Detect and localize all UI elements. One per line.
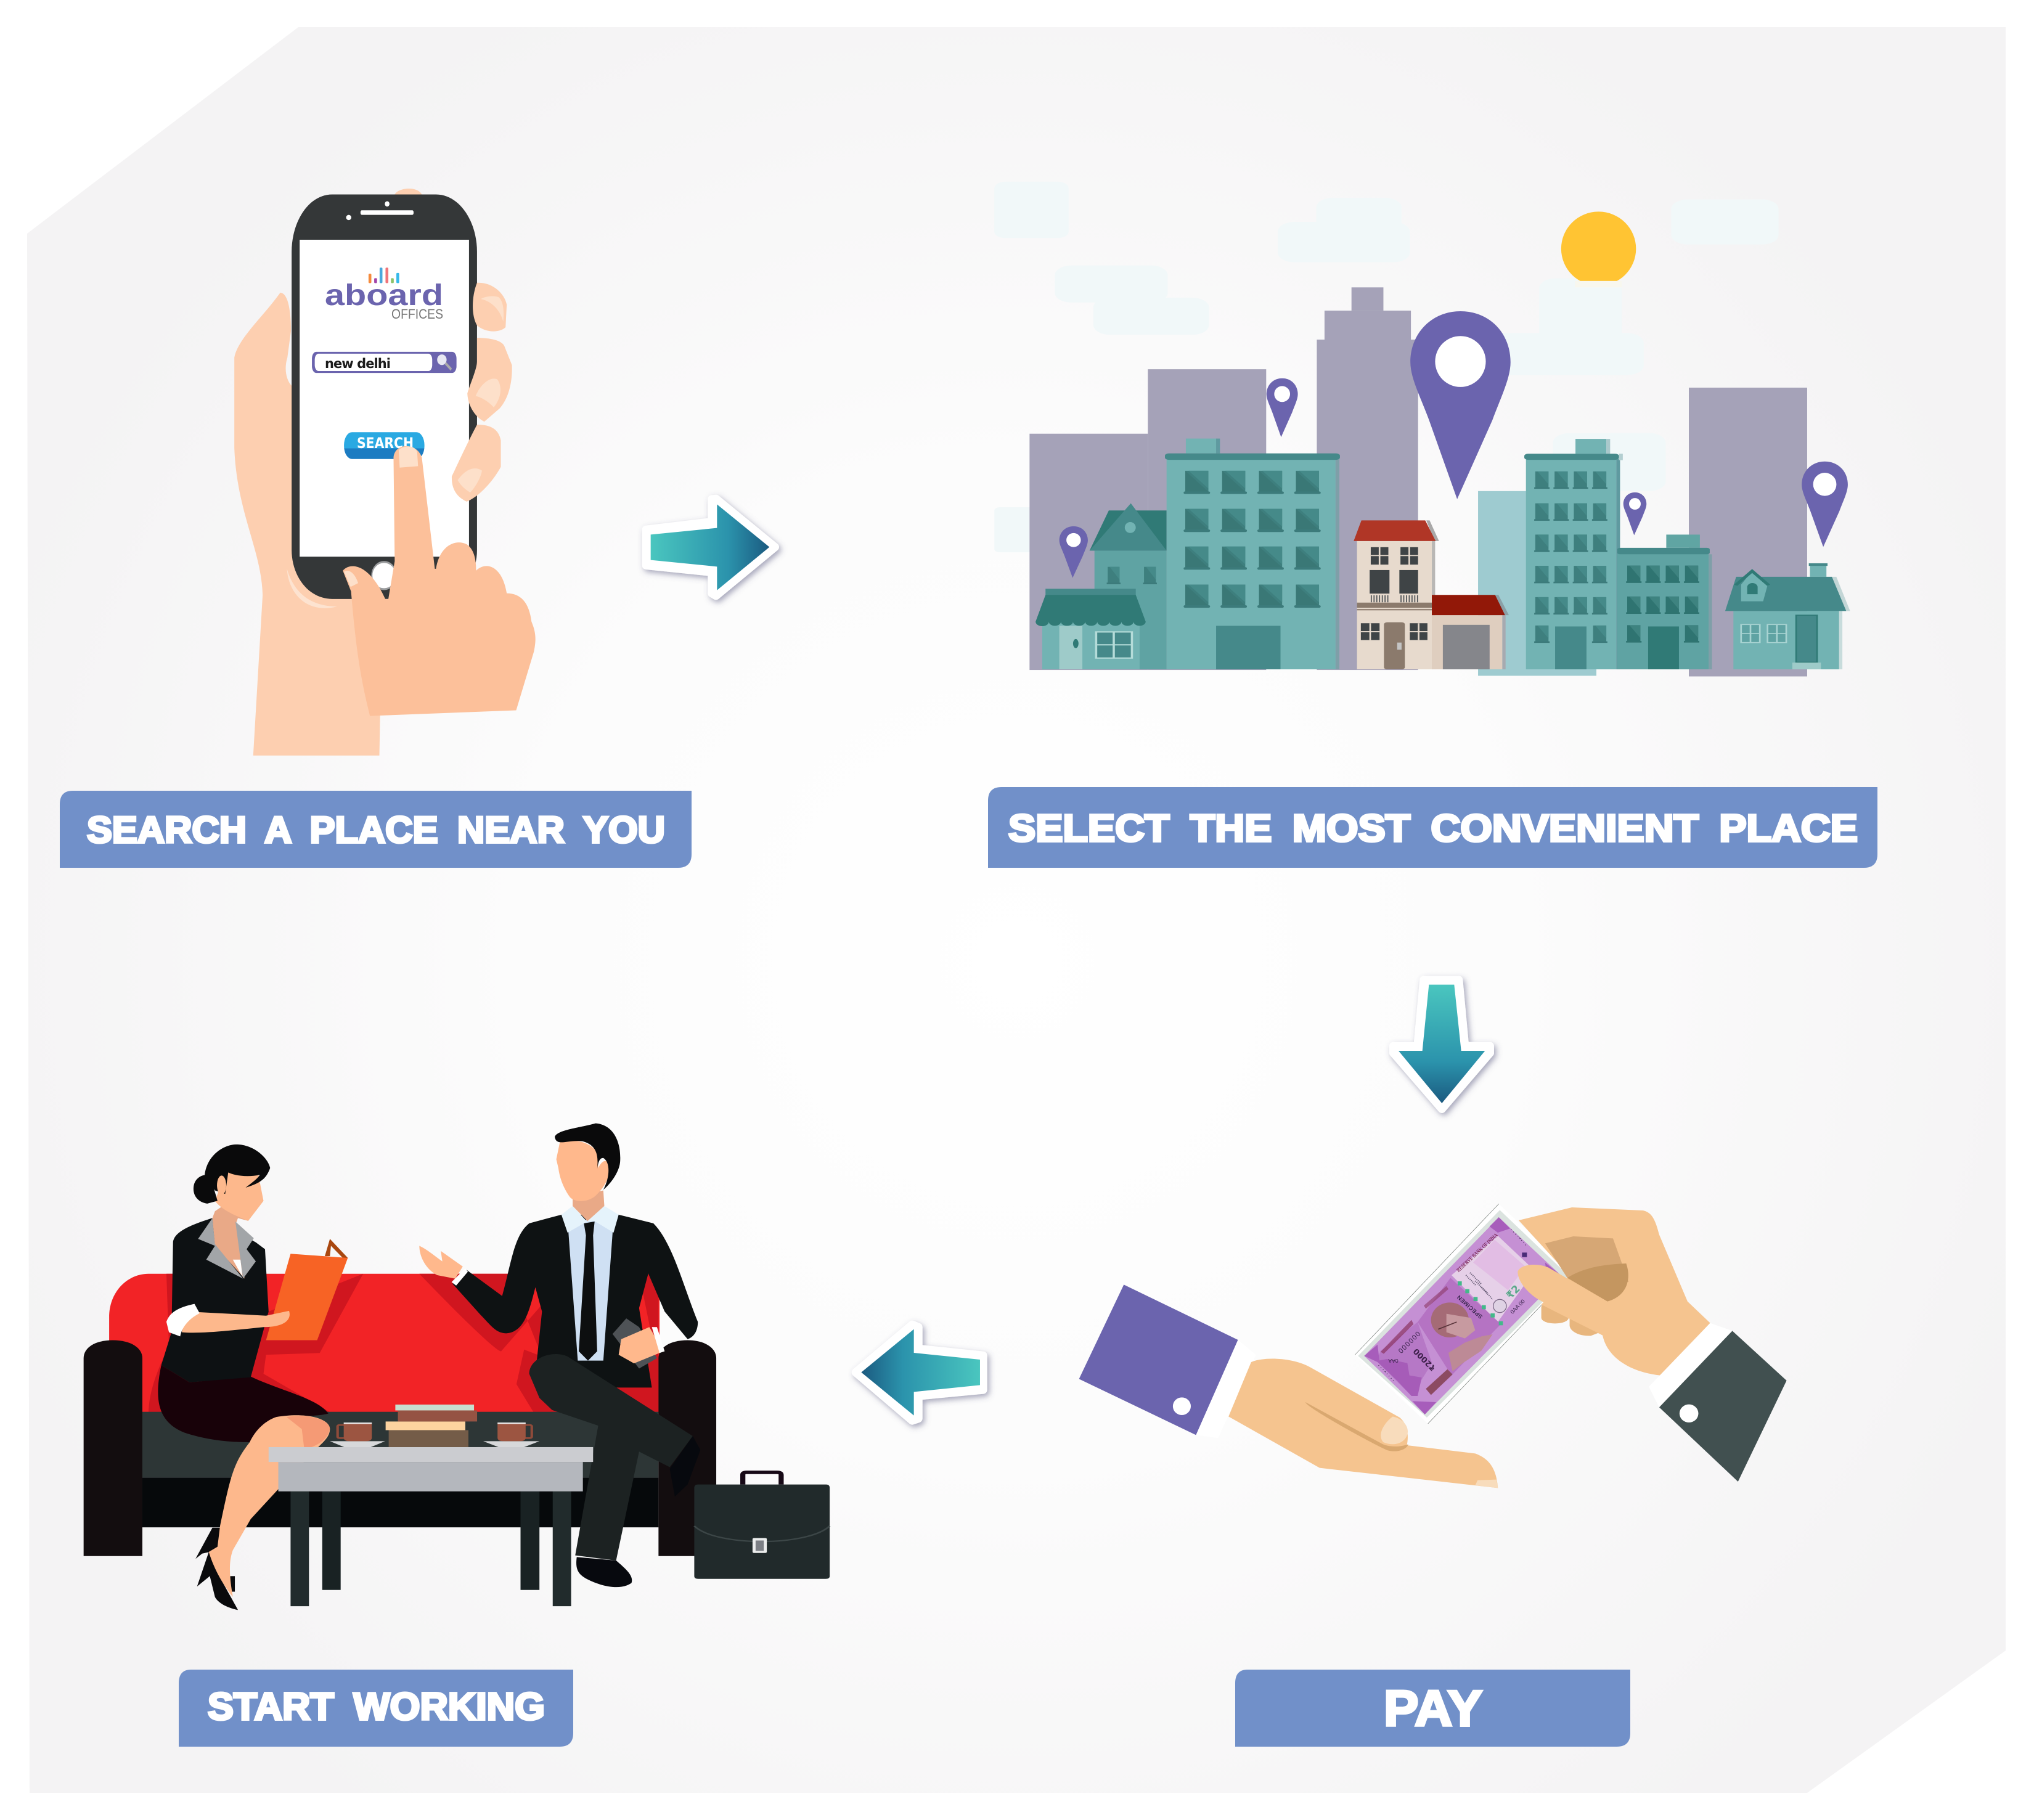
right pin xyxy=(1802,462,1848,547)
specimen stamp: SPECIMEN xyxy=(1456,1294,1484,1320)
scene: two hands exchanging banknote xyxy=(1079,1204,1787,1488)
big pin xyxy=(1410,311,1511,499)
low building xyxy=(1617,534,1712,669)
banner: pay xyxy=(1235,1670,1630,1747)
woman's arm xyxy=(166,1304,290,1336)
pale tower xyxy=(1478,491,1596,675)
green value: ₹2 xyxy=(1504,1283,1522,1301)
small pin xyxy=(1624,492,1646,535)
arrow: search to select xyxy=(646,499,775,596)
serial prefix: 0AA xyxy=(1388,1358,1399,1364)
cream townhouse xyxy=(1354,520,1439,669)
search field xyxy=(312,352,457,373)
receiving hand xyxy=(1228,1359,1498,1488)
sun xyxy=(1561,211,1636,287)
man xyxy=(419,1124,700,1587)
briefcase xyxy=(694,1472,830,1579)
banner: select the most convenient place xyxy=(988,787,1877,868)
shop with awning xyxy=(1035,589,1146,669)
back hand xyxy=(234,189,422,756)
menu book xyxy=(266,1239,348,1341)
left house xyxy=(1090,504,1167,669)
pointing hand xyxy=(343,446,536,716)
woman xyxy=(158,1145,330,1610)
banner: search a place near you: SEARCH A PLACE NEAR YOU xyxy=(87,809,665,851)
serial number: 000000 xyxy=(1397,1330,1422,1355)
search query: new delhi xyxy=(325,356,391,371)
banner: select the most convenient place: SELECT THE MOST CONVENIENT PLACE xyxy=(1008,807,1858,850)
scene: city with location pins xyxy=(994,182,1850,677)
right tall building xyxy=(1524,439,1623,669)
logo wordmark: aboard xyxy=(325,279,443,312)
scene: hand holding phone with search app xyxy=(234,189,536,756)
coffee table xyxy=(269,1447,593,1606)
second serial: 0AA 00 xyxy=(1509,1298,1526,1315)
garage xyxy=(1432,595,1509,669)
banner: pay: PAY xyxy=(1384,1681,1482,1737)
sofa xyxy=(84,1274,716,1556)
logo subtitle: OFFICES xyxy=(391,306,443,322)
cottage xyxy=(1725,563,1850,669)
table back legs xyxy=(322,1492,539,1590)
dark sleeve xyxy=(1649,1323,1787,1482)
phone body xyxy=(292,195,477,599)
holding fingers xyxy=(452,283,512,502)
small pin xyxy=(1267,378,1298,437)
small pin xyxy=(1060,526,1088,578)
arrow: select to pay xyxy=(1394,980,1490,1109)
back fingers xyxy=(1542,1300,1603,1336)
tall building with four rows of windows xyxy=(1165,439,1340,669)
issuer name: RESERVE BANK OF INDIA xyxy=(1456,1233,1500,1274)
purple sleeve xyxy=(1079,1284,1256,1438)
banner: start working xyxy=(179,1670,573,1747)
cup right xyxy=(483,1422,539,1447)
stacked books xyxy=(386,1405,477,1447)
giving hand xyxy=(1517,1207,1710,1376)
banner: start working: START WORKING xyxy=(208,1686,545,1728)
search button xyxy=(344,432,425,459)
clouds xyxy=(994,182,1779,552)
denomination: ₹2000 xyxy=(1411,1347,1437,1373)
logo bars xyxy=(369,267,399,283)
search button label: SEARCH xyxy=(357,435,414,452)
banner: search a place near you xyxy=(60,791,692,868)
background towers xyxy=(1029,287,1807,677)
arrow: pay to start working xyxy=(856,1324,983,1421)
scene: two people talking on a sofa xyxy=(84,1124,830,1610)
thumb crease xyxy=(287,569,337,608)
cup left xyxy=(330,1422,385,1447)
banknote xyxy=(1355,1204,1573,1424)
